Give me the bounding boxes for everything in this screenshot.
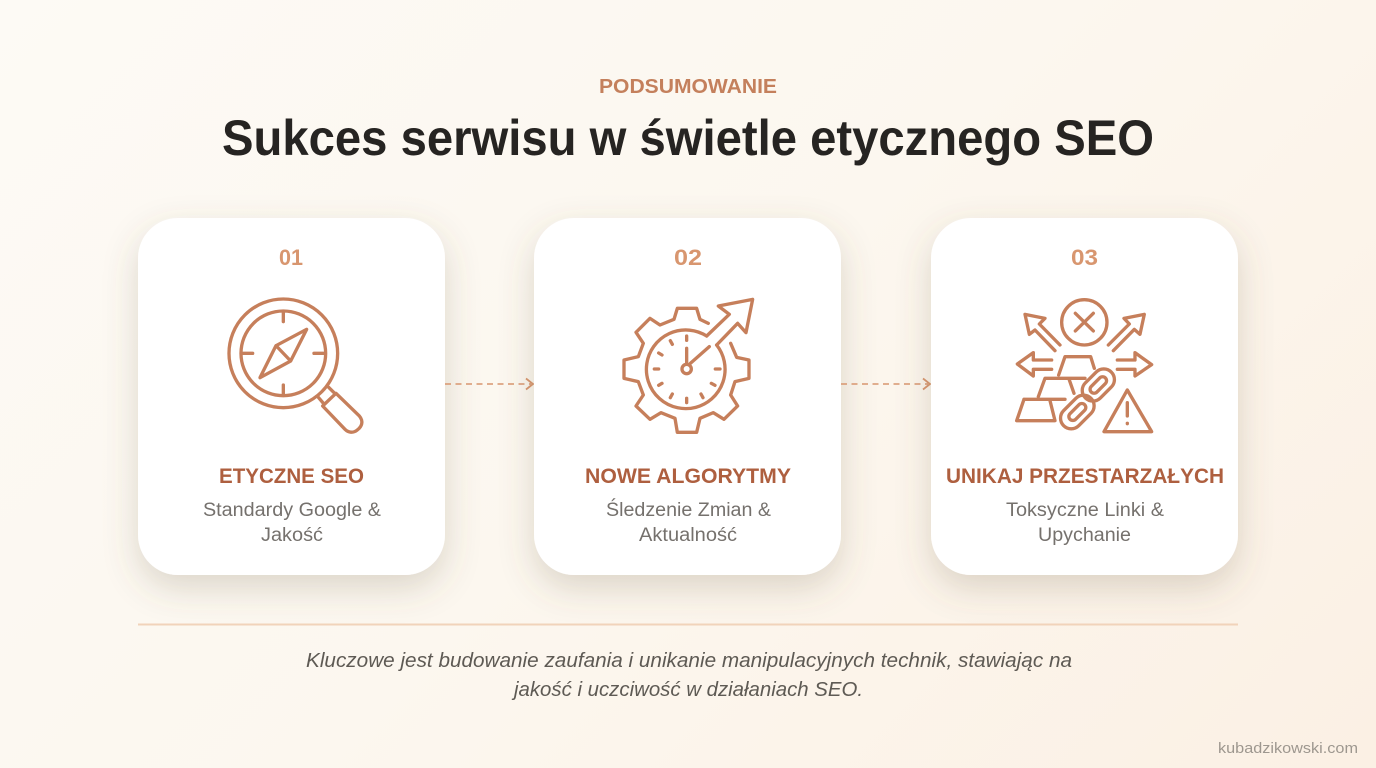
closing statement	[306, 650, 1072, 701]
card 3 description: Upychanie	[1038, 525, 1131, 546]
card 1 description	[203, 500, 381, 546]
panel: card 3	[931, 218, 1238, 575]
card 3 heading: UNIKAJ PRZESTARZAŁYCH	[946, 465, 1224, 488]
number 01: 01	[279, 245, 303, 270]
watermark: kubadzikowski.com	[1218, 740, 1358, 757]
icon: magnifier with compass	[229, 299, 362, 432]
number 02: 02	[674, 245, 702, 270]
card 1 heading: ETYCZNE SEO	[219, 465, 364, 488]
arrow: card 2 to card 3	[841, 378, 930, 390]
arrow: card 1 to card 2	[445, 378, 533, 390]
card 2 description: Aktualność	[639, 525, 737, 546]
icon: toxic links and outdated tactics	[1017, 300, 1152, 433]
icon: gear with clock and arrow	[624, 299, 753, 432]
eyebrow label: PODSUMOWANIE	[599, 76, 777, 98]
card 3 description	[1006, 500, 1164, 546]
closing statement: Kluczowe jest budowanie zaufania i unikanie manipulacyjnych technik, stawiając na	[306, 650, 1072, 672]
card 2 description	[606, 499, 771, 546]
title: Sukces serwisu w świetle etycznego SEO	[222, 110, 1154, 166]
card 1 description: Jakość	[261, 525, 323, 546]
panel: card 1	[138, 218, 445, 575]
card 2 heading: NOWE ALGORYTMY	[585, 465, 791, 488]
card 2 description: Śledzenie Zmian &	[606, 499, 771, 521]
closing statement: jakość i uczciwość w działaniach SEO.	[511, 679, 863, 701]
card 3 description: Toksyczne Linki &	[1006, 500, 1164, 521]
panel: card 2	[534, 218, 841, 575]
number 03: 03	[1071, 245, 1098, 270]
card 1 description: Standardy Google &	[203, 500, 381, 521]
